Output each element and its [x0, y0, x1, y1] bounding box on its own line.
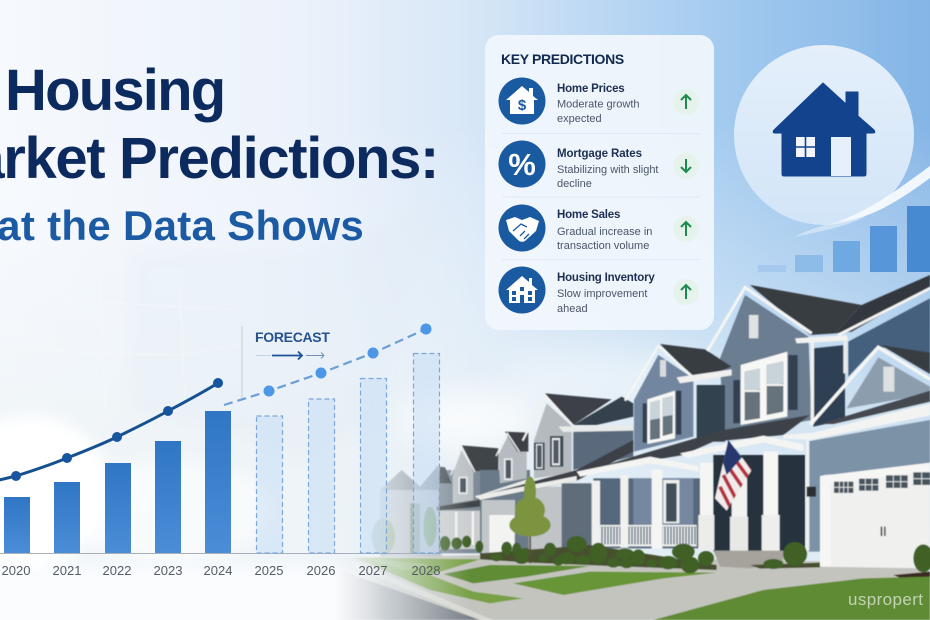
row: housing inventory: Housing Inventory	[557, 272, 655, 284]
row: home prices: $	[518, 97, 527, 114]
house D	[697, 385, 725, 442]
bar and line chart	[0, 324, 440, 578]
axis	[0, 552, 440, 554]
year labels: 2027	[359, 563, 387, 578]
row: mortgage rates: %	[508, 147, 536, 182]
street of houses photo illustration	[297, 275, 930, 620]
actual bars 2020-2024	[4, 411, 231, 553]
icon: house	[773, 83, 875, 176]
house emblem circle	[734, 45, 914, 225]
faint map grid lines	[0, 280, 240, 410]
year labels: 2020	[2, 563, 30, 578]
garage wing	[807, 420, 930, 552]
house C	[573, 425, 633, 470]
house A	[438, 470, 483, 553]
row: mortgage rates: Mortgage Rates	[557, 148, 642, 160]
row: home sales: transaction volume	[557, 240, 649, 252]
year labels: 2021	[53, 563, 81, 578]
house B	[480, 470, 530, 555]
year labels: 2023	[154, 563, 182, 578]
row: home prices: Moderate growth	[557, 98, 640, 110]
forecast trend line	[224, 324, 432, 405]
year labels: 2026	[307, 563, 335, 578]
watermark: uspropert	[848, 590, 923, 609]
title: Housing	[5, 58, 224, 123]
row: mortgage rates: Stabilizing with slight	[557, 164, 658, 176]
shrubs and trees	[440, 536, 930, 573]
faint US map backdrop	[0, 198, 450, 620]
row: mortgage rates: decline	[557, 178, 592, 190]
row: home sales	[498, 204, 699, 252]
lawns and driveway	[443, 565, 590, 583]
row: home prices	[498, 78, 699, 125]
year labels: 2024	[204, 563, 232, 578]
row: housing inventory: Slow improvement	[557, 288, 647, 300]
forecast label with arrows: FORECAST	[255, 329, 330, 345]
row: mortgage rates	[498, 140, 699, 190]
row: housing inventory: ahead	[557, 303, 588, 315]
year labels	[2, 563, 440, 578]
house E upper	[848, 298, 930, 377]
year labels: 2022	[103, 563, 131, 578]
decorative rising bars top right	[758, 206, 930, 272]
year labels: 2028	[412, 563, 440, 578]
porch	[593, 478, 700, 548]
panel heading: KEY PREDICTIONS	[501, 51, 624, 67]
title	[0, 58, 438, 249]
row: home prices: Home Prices	[557, 83, 624, 95]
swoosh	[795, 166, 930, 237]
forecast label with arrows	[242, 326, 330, 398]
forecast bars 2025-2028	[256, 354, 440, 553]
actual trend line	[0, 378, 223, 481]
far houses	[380, 490, 442, 557]
ground base	[323, 555, 930, 620]
row: home sales: Home Sales	[557, 209, 620, 221]
American flag	[713, 438, 755, 512]
planting beds	[480, 545, 717, 570]
panel: key predictions	[485, 35, 714, 330]
row: home prices: expected	[557, 113, 602, 125]
row: housing inventory	[498, 266, 699, 315]
row: home sales: Gradual increase in	[557, 226, 652, 238]
road left	[354, 576, 480, 620]
year labels: 2025	[255, 563, 283, 578]
young tree	[509, 477, 551, 563]
